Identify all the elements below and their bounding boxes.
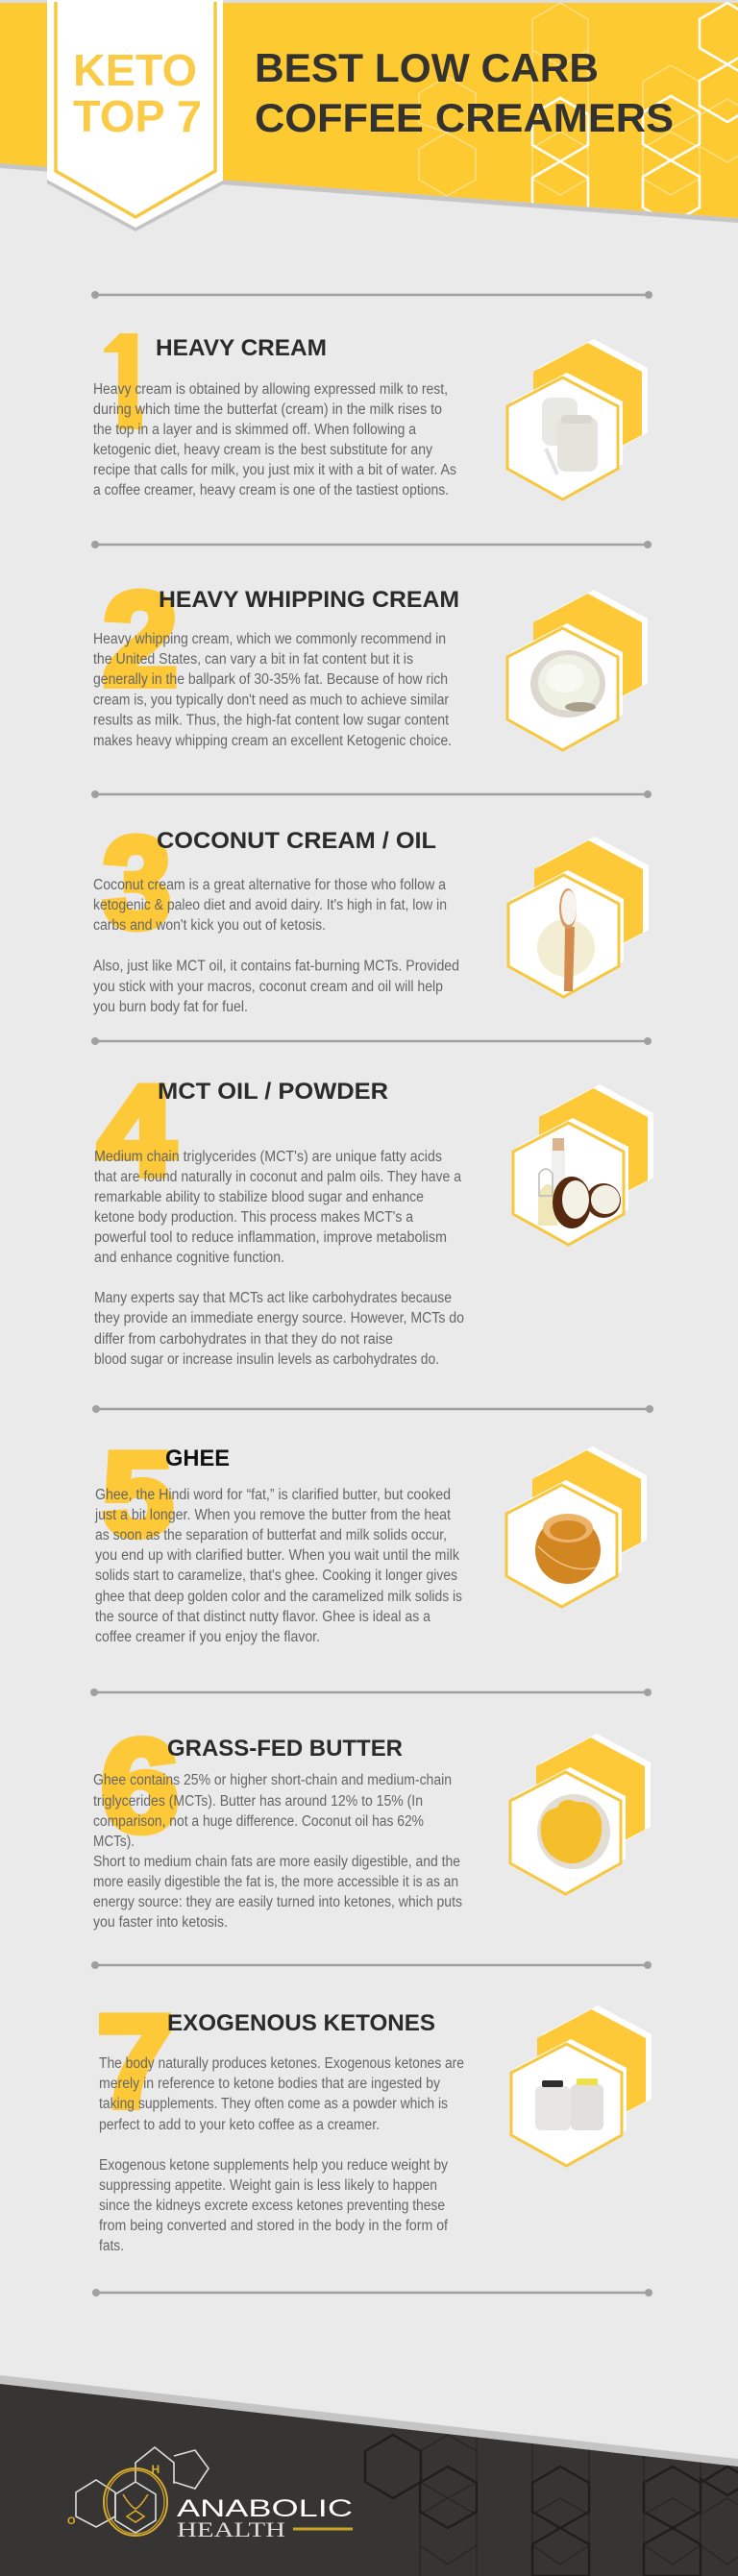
text block 4: differ from carbohydrates in that they do not raise xyxy=(94,1331,393,1348)
text block 3: Also, just like MCT oil, it contains fat-burning MCTs. Provided xyxy=(93,959,459,974)
text block 6: energy source: they are easily turned into ketones, which puts xyxy=(93,1894,462,1910)
icon: supplement bottles xyxy=(511,2005,652,2166)
text block 7: since the kidneys excrete excess ketones preventing these xyxy=(99,2198,445,2214)
text block 3: Coconut cream is a great alternative for those who follow a xyxy=(93,877,446,893)
text block 1 xyxy=(93,381,456,498)
heading 1: HEAVY CREAM xyxy=(156,335,327,361)
text block 7: perfect to add to your keto coffee as a creamer. xyxy=(99,2117,380,2133)
text block 4: Many experts say that MCTs act like carbohydrates because xyxy=(94,1290,452,1306)
title: COFFEE CREAMERS xyxy=(255,95,674,140)
badge label: TOP 7 xyxy=(73,91,202,141)
wordmark: ANABOLIC xyxy=(177,2495,353,2522)
text block 4: ketone body production. This process makes MCT's a xyxy=(94,1209,413,1226)
text block 6: more easily digestible the fat is, the more accessible it is as an xyxy=(93,1874,458,1890)
text block 6: comparison, not a huge difference. Coconut oil has 62% xyxy=(93,1813,424,1830)
text block 4: remarkable ability to stabilize blood sugar and enhance xyxy=(94,1189,424,1205)
logo mark xyxy=(76,2447,209,2536)
logo: anabolic health xyxy=(67,2447,353,2541)
text block 5: you end up with clarified butter. When you wait until the milk xyxy=(95,1547,459,1564)
text block 1: recipe that calls for milk, you just mix it with a bit of water. As xyxy=(93,462,456,478)
text block 5: Ghee, the Hindi word for “fat,” is clarified butter, but cooked xyxy=(95,1487,451,1503)
text block 4: powerful tool to reduce inflammation, improve metabolism xyxy=(94,1229,447,1246)
text block 4: Medium chain triglycerides (MCT's) are unique fatty acids xyxy=(94,1149,442,1165)
heading 7: EXOGENOUS KETONES xyxy=(167,2010,435,2036)
text block 1: the top in a layer and is skimmed off. When following a xyxy=(93,422,416,438)
divider top xyxy=(91,291,652,299)
heading 6: GRASS-FED BUTTER xyxy=(167,1736,403,1762)
text block 3: ketogenic & paleo diet and avoid dairy. It's high in fat, low in xyxy=(93,897,447,913)
number 5: 5 xyxy=(103,1429,173,1561)
hexagon pattern xyxy=(419,3,738,225)
panel: 7 exogenous ketones xyxy=(97,1988,652,2254)
panel: 2 heavy whipping cream xyxy=(93,566,648,750)
text block 7: merely in reference to ketone bodies that are ingested by xyxy=(99,2076,440,2092)
panel: 4 mct oil / powder xyxy=(94,1060,653,1368)
text block 7: from being converted and stored in the body in the form of xyxy=(99,2218,449,2234)
text block 4: that are found naturally in coconut and palm oils. They have a xyxy=(94,1169,461,1185)
text block 3 xyxy=(93,877,459,1015)
text block 7: Exogenous ketone supplements help you reduce weight by xyxy=(99,2157,448,2174)
panel: 5 ghee xyxy=(94,1429,647,1645)
icon: bowl of cream xyxy=(507,590,648,750)
heading 3: COCONUT CREAM / OIL xyxy=(157,828,436,854)
text block 6: MCTs). xyxy=(93,1834,135,1850)
text block 5: as soon as the separation of butterfat and milk solids occur, xyxy=(95,1527,447,1543)
icon: cream jars xyxy=(507,339,648,499)
text block 6 xyxy=(93,1772,462,1931)
ribbon badge xyxy=(47,0,223,231)
wordmark xyxy=(177,2495,353,2541)
heading 4: MCT OIL / POWDER xyxy=(158,1079,388,1105)
divider bottom xyxy=(92,2289,652,2297)
number 7: 7 xyxy=(97,1988,173,2134)
text block 3: you stick with your macros, coconut cream and oil will help xyxy=(93,979,443,995)
text block 7: taking supplements. They often come as a powder which is xyxy=(99,2096,448,2112)
heading 2: HEAVY WHIPPING CREAM xyxy=(159,587,459,613)
heading 5: GHEE xyxy=(165,1446,230,1471)
text block 6: Ghee contains 25% or higher short-chain and medium-chain xyxy=(93,1772,452,1788)
footer hexagon pattern xyxy=(365,2435,738,2576)
icon: jar of ghee xyxy=(506,1446,647,1607)
number 6: 6 xyxy=(101,1713,179,1859)
divider 1-2 xyxy=(91,541,652,548)
text block 5 xyxy=(94,1487,462,1645)
panel: 3 coconut cream / oil xyxy=(93,812,649,1015)
wordmark: HEALTH xyxy=(177,2517,285,2541)
text block 6: you faster into ketosis. xyxy=(93,1914,228,1931)
text block 7 xyxy=(99,2055,464,2254)
text block 2: generally in the ballpark of 30-35% fat. Because of how rich xyxy=(93,671,448,688)
logo letters H and O: H xyxy=(152,2463,160,2476)
text block 4: they provide an immediate energy source. However, MCTs do xyxy=(94,1310,464,1326)
divider 6-7 xyxy=(91,1961,652,1969)
icon: oil bottles and coconut xyxy=(513,1084,653,1245)
title: BEST LOW CARB xyxy=(255,45,599,90)
icon: coconut cream with wooden spoon xyxy=(508,837,649,997)
text block 7: fats. xyxy=(99,2238,124,2254)
badge label: KETO xyxy=(73,45,197,95)
text block 6: triglycerides (MCTs). Butter has around 12% to 15% (In xyxy=(93,1793,423,1810)
text block 1: a coffee creamer, heavy cream is one of the tastiest options. xyxy=(93,482,449,498)
text block 2: cream is, you typically don't need as much to achieve similar xyxy=(93,692,449,709)
text block 2: Heavy whipping cream, which we commonly recommend in xyxy=(93,631,446,647)
panel: 6 grass-fed butter xyxy=(93,1713,651,1931)
divider 3-4 xyxy=(91,1037,652,1045)
number 4: 4 xyxy=(98,1060,175,1203)
text block 1: ketogenic diet, heavy cream is the best substitute for any xyxy=(93,442,432,458)
title xyxy=(255,45,674,140)
divider 5-6 xyxy=(90,1689,652,1696)
panel: 1 heavy cream xyxy=(93,333,648,501)
number 1: 1 xyxy=(102,309,150,455)
text block 5: the source of that distinct nutty flavor. Ghee is ideal as a xyxy=(95,1609,430,1625)
text block 2 xyxy=(93,631,452,749)
text block 3: you burn body fat for fuel. xyxy=(93,999,248,1015)
text block 5: ghee that deep golden color and the caramelized milk solids is xyxy=(95,1589,462,1605)
number 2: 2 xyxy=(103,566,178,714)
icon: bowl of butter xyxy=(510,1734,651,1894)
text block 4 xyxy=(94,1149,464,1368)
logo letters H and O xyxy=(67,2463,160,2527)
text block 5: solids start to caramelize, that's ghee. Cooking it longer gives xyxy=(95,1567,457,1584)
text block 7: The body naturally produces ketones. Exogenous ketones are xyxy=(99,2055,464,2072)
text block 1: during which time the butterfat (cream) in the milk rises to xyxy=(93,401,442,418)
divider 4-5 xyxy=(92,1405,653,1413)
number 3: 3 xyxy=(103,812,171,955)
badge label xyxy=(73,45,202,141)
divider 2-3 xyxy=(91,790,652,798)
text block 2: results as milk. Thus, the high-fat content low sugar content xyxy=(93,713,450,728)
text block 5: coffee creamer if you enjoy the flavor. xyxy=(95,1629,320,1645)
text block 4: blood sugar or increase insulin levels as carbohydrates do. xyxy=(94,1351,439,1368)
text block 2: the United States, can vary a bit in fat content but it is xyxy=(93,651,413,668)
text block 1: Heavy cream is obtained by allowing expressed milk to rest, xyxy=(93,381,448,398)
logo letters H and O: O xyxy=(67,2515,76,2527)
text block 3: carbs and won't kick you out of ketosis. xyxy=(93,917,326,934)
text block 7: suppressing appetite. Weight gain is less likely to happen xyxy=(99,2177,437,2194)
text block 5: just a bit longer. When you remove the butter from the heat xyxy=(94,1507,452,1523)
text block 4: and enhance cognitive function. xyxy=(94,1250,284,1266)
text block 2: makes heavy whipping cream an excellent Ketogenic choice. xyxy=(93,733,452,749)
footer xyxy=(0,2375,738,2576)
text block 6: Short to medium chain fats are more easily digestible, and the xyxy=(93,1854,460,1870)
header banner xyxy=(0,0,738,231)
